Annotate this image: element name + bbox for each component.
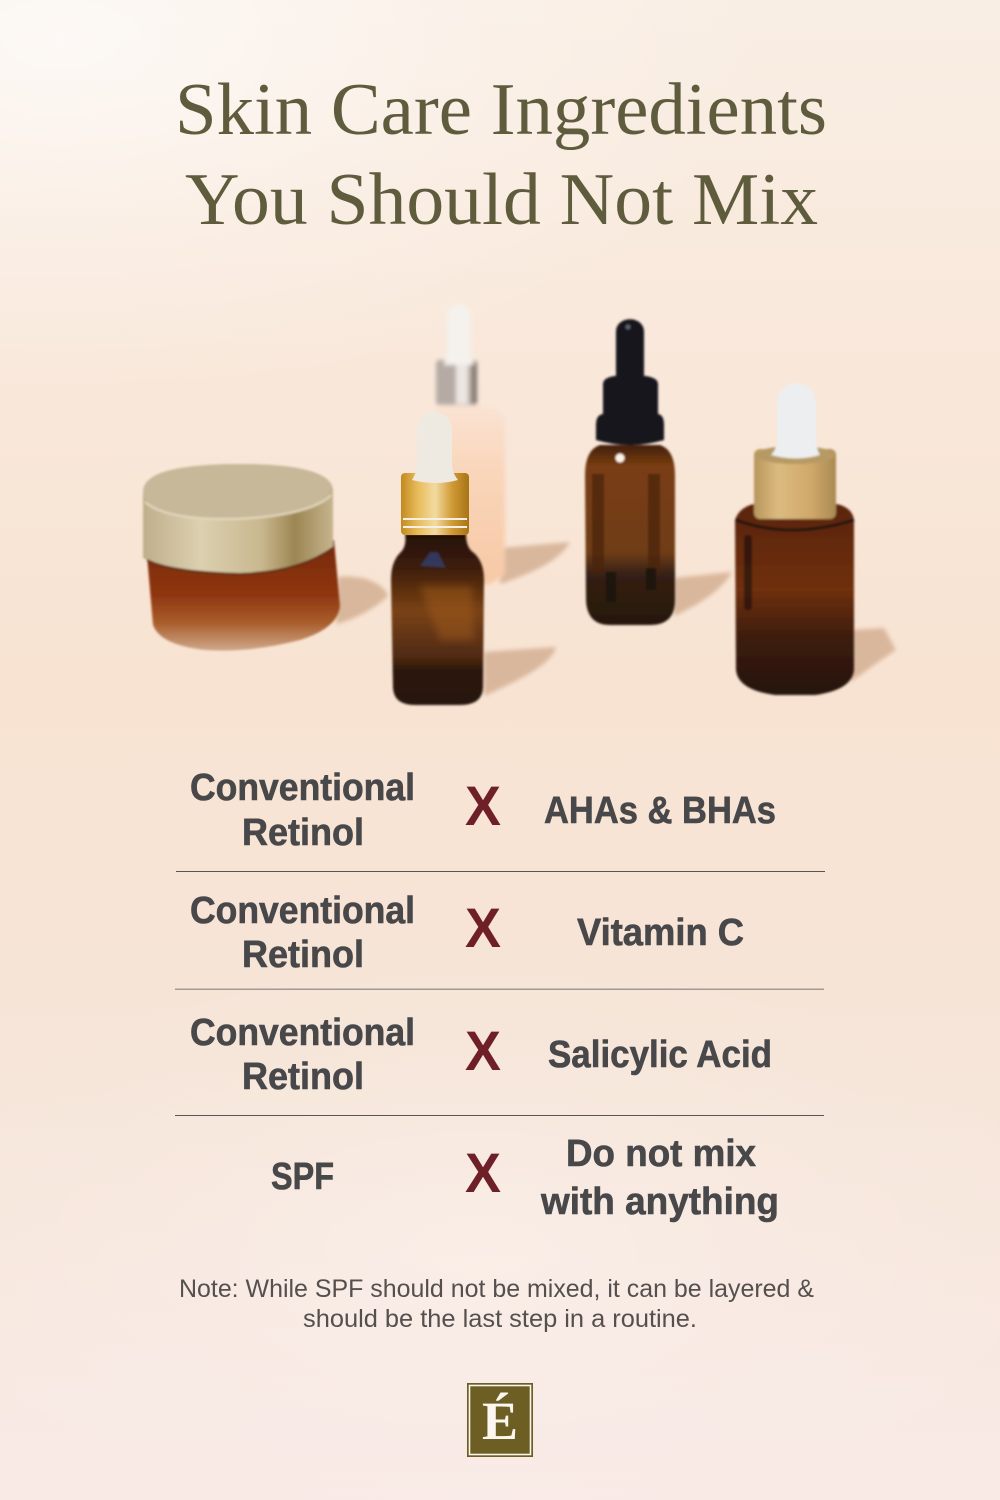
logo bbox=[467, 1383, 533, 1457]
logo: É bbox=[482, 1391, 518, 1451]
note bbox=[179, 1275, 814, 1333]
row 1: Conventional bbox=[190, 767, 415, 809]
row 4: SPF bbox=[271, 1156, 334, 1198]
row 2: Vitamin C bbox=[577, 912, 744, 954]
row 4: X bbox=[465, 1141, 501, 1204]
row 4 bbox=[271, 1133, 779, 1223]
jar bbox=[143, 464, 340, 651]
row 3 bbox=[190, 1012, 772, 1098]
row 3: Retinol bbox=[242, 1056, 364, 1098]
row 2: X bbox=[465, 896, 501, 959]
row 3: X bbox=[465, 1019, 501, 1082]
title: Skin Care Ingredients bbox=[175, 69, 827, 151]
gold collar wide bottle bbox=[735, 383, 854, 695]
row 4: with anything bbox=[540, 1181, 779, 1223]
row 3: Conventional bbox=[190, 1012, 415, 1054]
row 1 bbox=[190, 767, 776, 854]
row 1: AHAs & BHAs bbox=[544, 790, 776, 832]
row 1: X bbox=[465, 774, 501, 837]
row 2: Retinol bbox=[242, 934, 364, 976]
product photo bbox=[143, 304, 896, 705]
shadows bbox=[336, 542, 896, 696]
row 4: Do not mix bbox=[566, 1133, 756, 1175]
row 3: Salicylic Acid bbox=[548, 1034, 772, 1076]
row 2 bbox=[190, 890, 744, 976]
row 1: Retinol bbox=[242, 812, 364, 854]
gold cap bottle bbox=[391, 412, 484, 705]
back bottle bbox=[436, 304, 505, 584]
title bbox=[175, 69, 827, 241]
black dropper bottle bbox=[585, 319, 675, 625]
note: should be the last step in a routine. bbox=[303, 1305, 697, 1333]
title: You Should Not Mix bbox=[185, 159, 818, 241]
row 2: Conventional bbox=[190, 890, 415, 932]
note: Note: While SPF should not be mixed, it can be layered & bbox=[179, 1275, 814, 1303]
